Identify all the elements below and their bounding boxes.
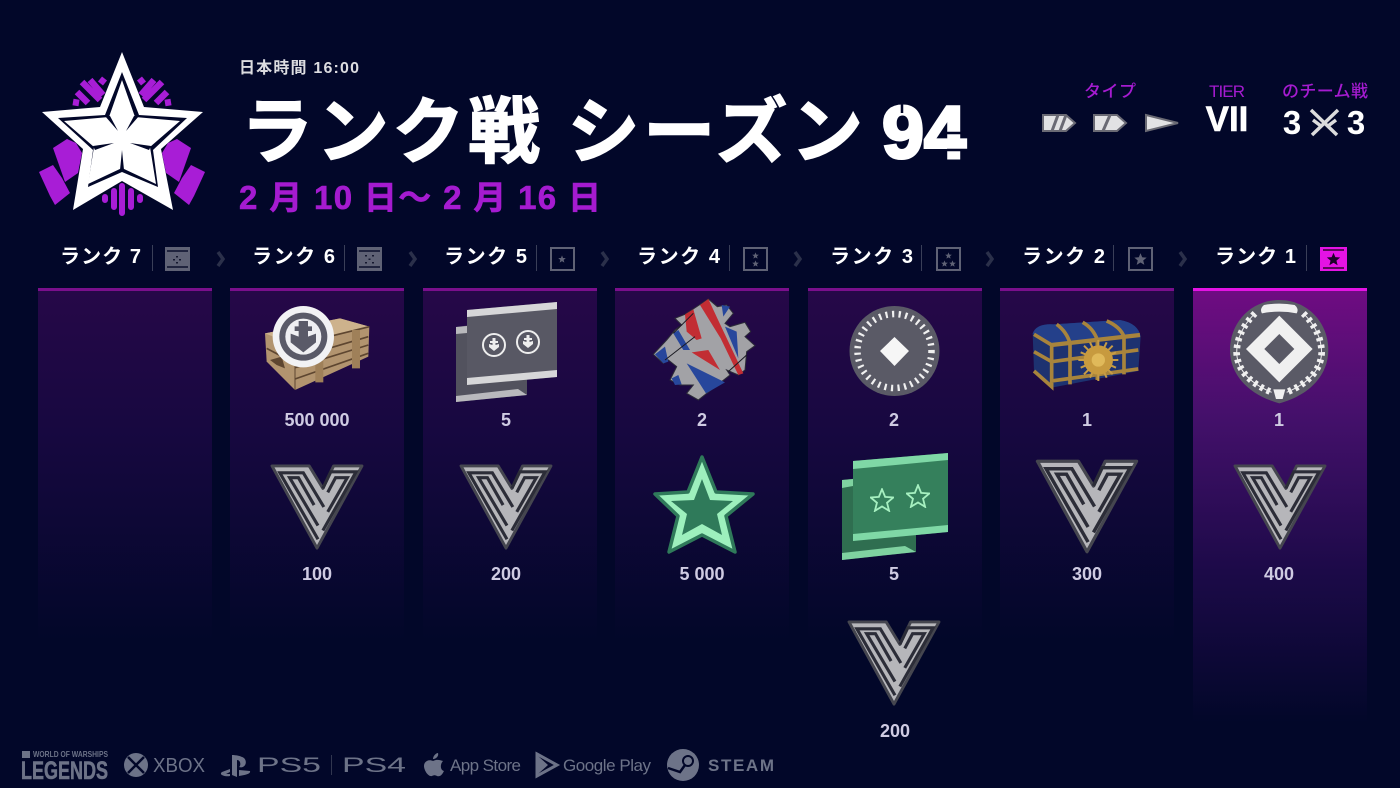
logo: Xbox (124, 753, 205, 777)
rank 1 header: ランク 1 (1215, 245, 1296, 268)
icon: grey signal flags (456, 302, 557, 402)
logo: PS5 and PS4: PS4 (342, 754, 407, 777)
flags amount: 5 (501, 410, 511, 430)
rank 6 header: ランク 6 (252, 245, 335, 268)
panel: rank 7 (38, 288, 212, 641)
token amount: 2 (889, 410, 899, 430)
info: tier: VII (1206, 100, 1248, 139)
credits amount: 500 000 (284, 410, 350, 430)
rank 7 header: ランク 7 (60, 245, 141, 268)
logo: Google Play (537, 754, 652, 776)
logo: Steam (667, 749, 774, 781)
panel: rank 2 (1000, 288, 1174, 641)
icon: rank points V (1037, 461, 1137, 552)
panel: rank 3 (808, 288, 982, 741)
info: tier (1206, 82, 1248, 139)
flags amount: 5 (889, 564, 899, 584)
info: team battle (1282, 82, 1368, 141)
icon: union jack camouflage (653, 299, 755, 400)
title number 94: 94 (882, 91, 966, 174)
chest amount: 1 (1082, 410, 1092, 430)
rank header row (60, 245, 1347, 271)
info: team battle: 3 (1283, 104, 1301, 141)
emblem amount: 1 (1274, 410, 1284, 430)
icon: rank points V (272, 466, 362, 548)
info: team battle: 3 (1347, 104, 1365, 141)
title: ランク戦 シーズン (241, 93, 863, 173)
rank points 400: 400 (1264, 564, 1294, 584)
rank 7 header (60, 245, 190, 271)
emblem: season star (39, 52, 205, 213)
info: ship types (1043, 82, 1178, 131)
icon: green star centre (671, 479, 733, 535)
icon: blue and gold chest (1033, 320, 1141, 388)
icon: rank points V (1235, 466, 1325, 548)
rank 4 header (637, 245, 767, 271)
icon: green signal flags (842, 453, 948, 560)
rank 2 header: ランク 2 (1022, 245, 1105, 268)
camouflage amount: 2 (697, 410, 707, 430)
info: team battle: のチーム戦 (1282, 82, 1368, 101)
rank points 200: 200 (880, 721, 910, 741)
panel: rank 5 (423, 288, 597, 641)
logo: PS5 and PS4 (221, 754, 407, 777)
rank 2 header (1022, 245, 1152, 271)
icon: green star (655, 457, 753, 552)
logo: World of Warships Legends: WORLD OF WARSHIPS (33, 750, 109, 759)
icon: rank points V (849, 622, 939, 704)
info: ship types: タイプ (1084, 82, 1136, 101)
logo: World of Warships Legends: LEGENDS (21, 757, 108, 785)
logo: Steam: STEAM (708, 756, 774, 775)
logo: PS5 and PS4: PS5 (257, 754, 321, 777)
rank 3 header (830, 245, 960, 271)
chevrons between ranks (218, 252, 1185, 266)
panel: rank 4 (615, 288, 789, 641)
logo: App Store (424, 753, 521, 776)
info: tier: TIER (1209, 82, 1245, 101)
logo: World of Warships Legends (21, 750, 109, 785)
icon: grey round token (850, 306, 940, 396)
logo: Xbox: XBOX (153, 755, 205, 777)
logo: App Store: App Store (450, 756, 521, 775)
rank 1 header (1215, 245, 1347, 271)
icon: credits crate (265, 306, 369, 390)
logo: Google Play: Google Play (563, 756, 652, 775)
panel: rank 6 (230, 288, 404, 641)
icon: rank points V (461, 466, 551, 548)
elite xp amount: 5 000 (679, 564, 725, 584)
footer logos (21, 749, 774, 785)
rank 4 header: ランク 4 (637, 245, 721, 268)
rank points 100: 100 (302, 564, 332, 584)
rank points 300: 300 (1072, 564, 1102, 584)
rank points 200: 200 (491, 564, 521, 584)
rank 5 header: ランク 5 (444, 245, 527, 268)
date range: 2 月 10 日〜 2 月 16 日 (239, 179, 601, 216)
rank 6 header (252, 245, 382, 271)
panel: rank 1 (1193, 288, 1367, 723)
subtitle: time: 日本時間 16:00 (239, 59, 359, 77)
icon: laurel emblem (1230, 300, 1328, 403)
rank 5 header (444, 245, 574, 271)
rank 3 header: ランク 3 (830, 245, 913, 268)
